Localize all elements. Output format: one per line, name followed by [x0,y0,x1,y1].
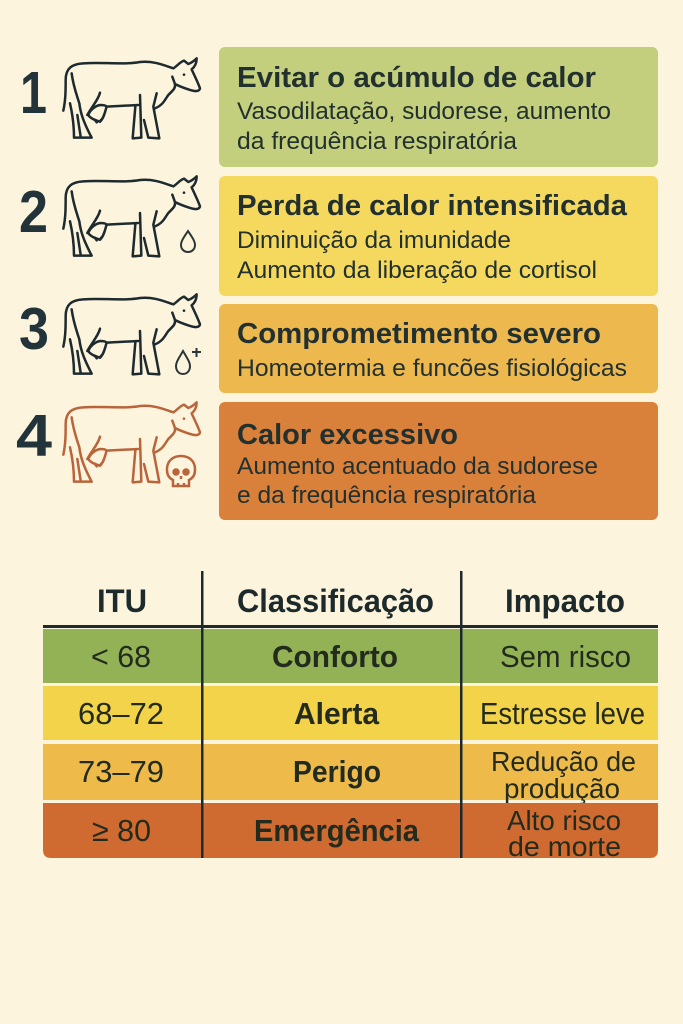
panel: step 2: Aumento da liberação de cortisol [237,257,597,284]
row: emergência [43,803,658,862]
number 1: 1 [20,60,47,126]
step 3 [19,294,658,393]
step 1 [20,47,658,167]
table header: Impacto [505,583,625,619]
row: alerta: Alerta [294,696,380,731]
panel: step 3: Homeotermia e funcões fisiológicas [237,355,627,382]
panel: step 2 [219,176,658,296]
number 2: 2 [19,179,48,245]
row: alerta: 68–72 [78,696,164,731]
table header: ITU [97,583,147,619]
row: emergência: ≥ 80 [92,813,151,848]
number 3: 3 [19,296,49,362]
row: alerta [43,686,658,740]
panel: step 1: Vasodilatação, sudorese, aumento [237,98,611,125]
number 4: 4 [16,403,52,469]
row: conforto: Sem risco [500,639,631,674]
row: emergência: de morte [508,831,621,862]
row: perigo [43,744,658,804]
table header: Classificação [237,583,434,619]
panel: step 1: da frequência respiratória [237,128,518,155]
icon: cow 4 [63,402,200,482]
panel: step 3: Comprometimento severo [237,318,601,350]
row: perigo: produção [504,773,620,804]
panel: step 4 [219,402,658,520]
table: ITU classification [43,571,658,862]
panel: step 4: e da frequência respiratória [237,482,537,509]
icon: drop with plus [176,348,201,374]
panel: step 3 [219,304,658,393]
panel: step 2: Perda de calor intensificada [237,190,628,222]
row: conforto: < 68 [91,639,151,674]
step 2 [19,176,658,296]
row: alerta: Estresse leve [480,696,645,731]
panel: step 1: Evitar o acúmulo de calor [237,62,596,94]
row: emergência: Alto risco [507,805,621,836]
panel: step 1 [219,47,658,167]
panel: step 2: Diminuição da imunidade [237,227,511,254]
row: perigo: Redução de [491,746,636,777]
panel: step 4: Calor excessivo [237,419,458,451]
icon: cow 1 [63,58,200,138]
row: perigo: Perigo [293,754,381,789]
table header [97,583,625,619]
icon: skull [167,456,195,486]
row: conforto: Conforto [272,639,398,674]
panel: step 4: Aumento acentuado da sudorese [237,453,598,480]
icon: drop [181,231,195,252]
row: conforto [43,629,658,683]
step 4 [16,402,658,520]
icon: cow 3 [63,294,200,374]
row: emergência: Emergência [254,813,420,848]
row: perigo: 73–79 [78,754,164,789]
icon: cow 2 [63,176,200,256]
